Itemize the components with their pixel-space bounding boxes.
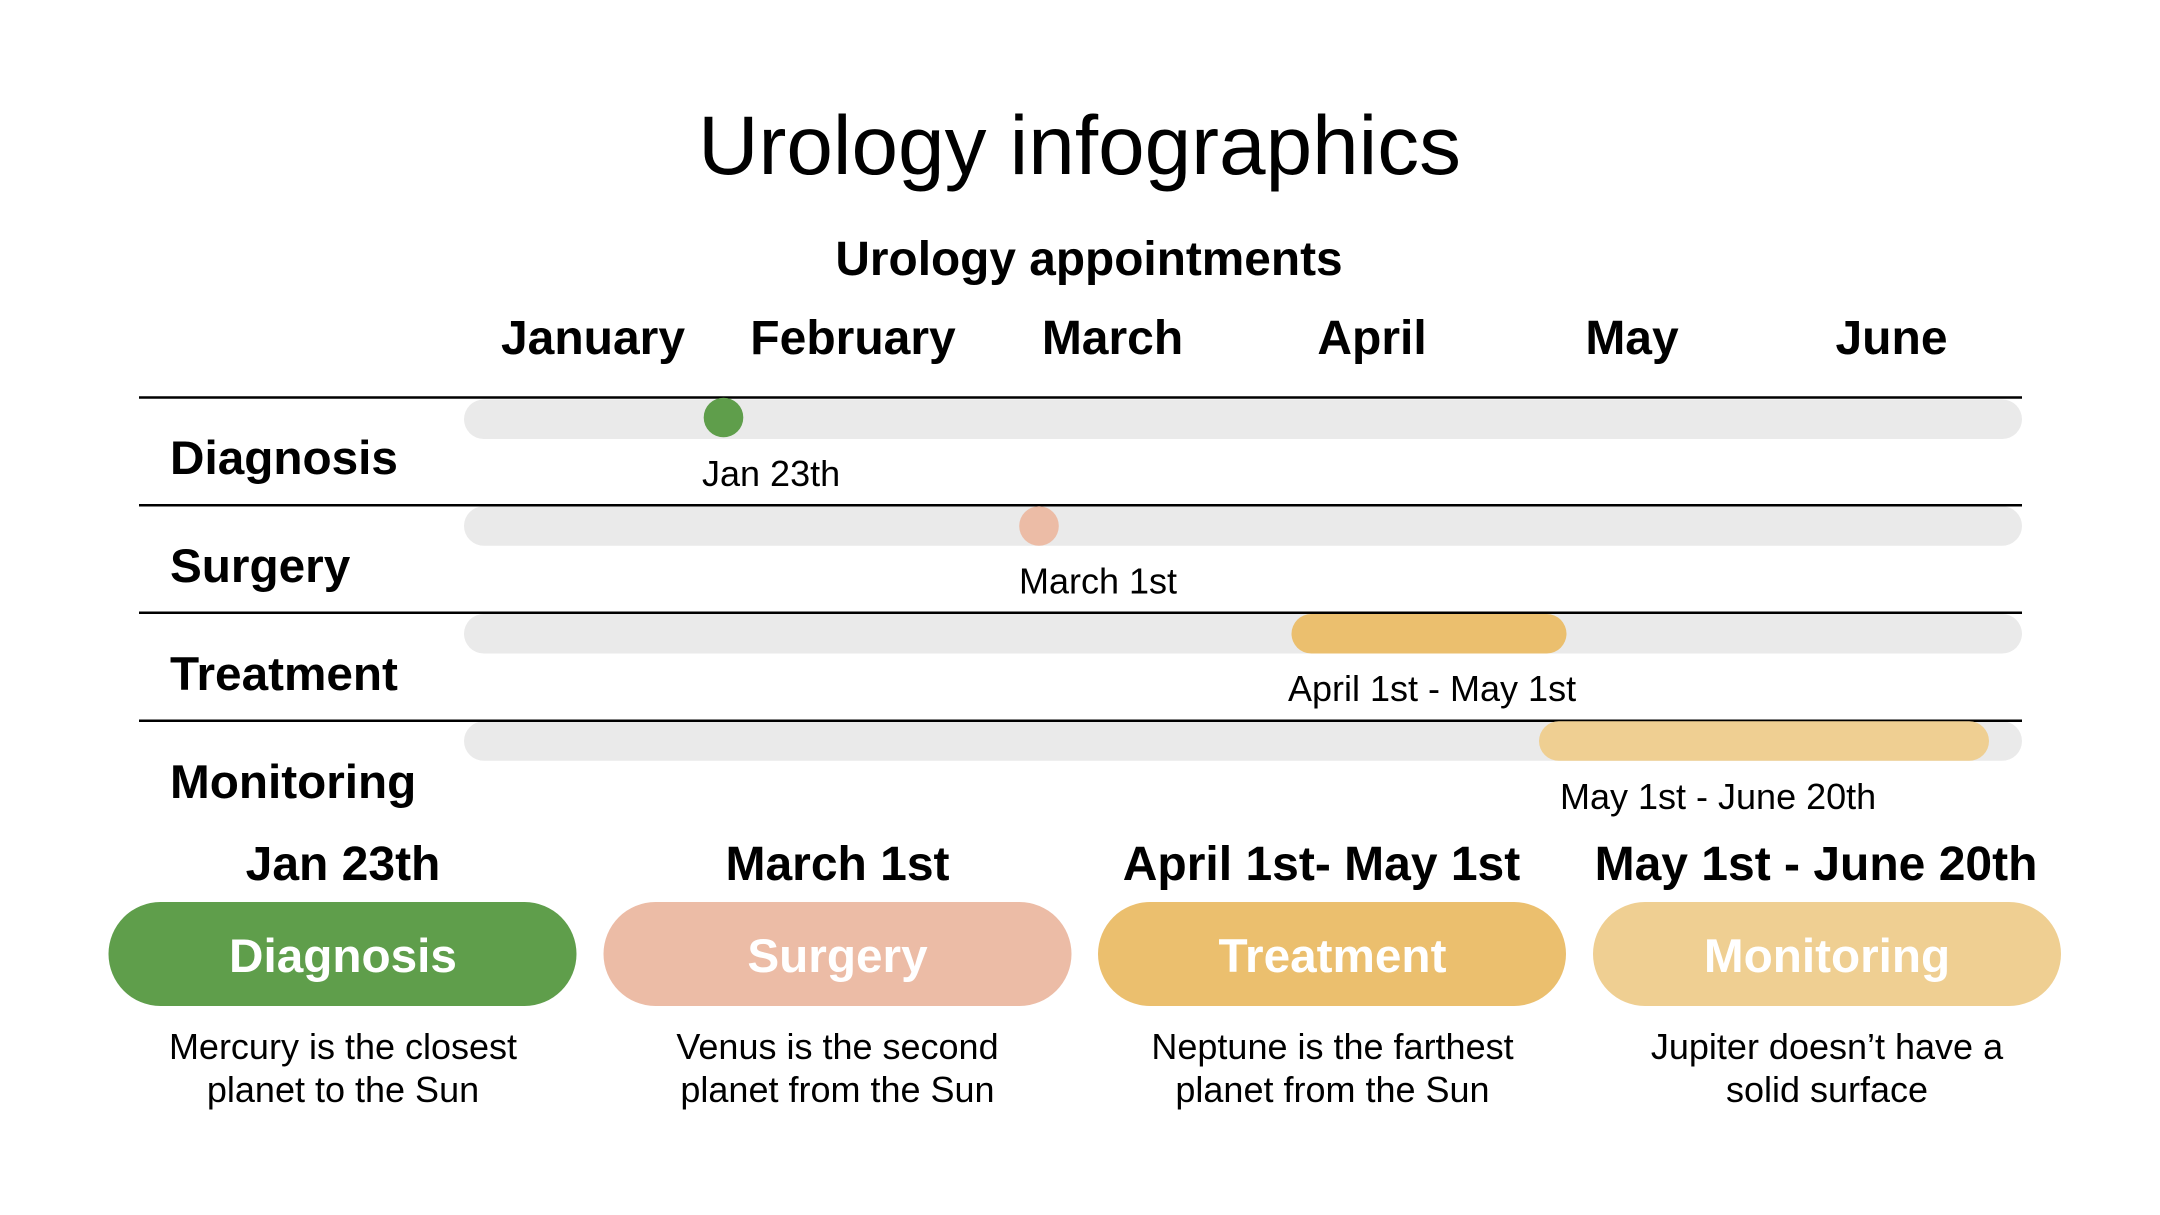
month headers: May bbox=[1585, 312, 1679, 365]
panel: surgery card: March 1st bbox=[725, 838, 950, 891]
row: treatment bbox=[139, 613, 2022, 709]
panel: diagnosis card: Diagnosis bbox=[229, 930, 457, 983]
panel: diagnosis card: planet to the Sun bbox=[207, 1069, 479, 1110]
row: monitoring bbox=[139, 721, 2022, 817]
month headers bbox=[501, 312, 1948, 365]
panel: diagnosis card: Mercury is the closest bbox=[169, 1026, 517, 1067]
title: Urology infographics bbox=[698, 98, 1461, 192]
panel: diagnosis card bbox=[108, 838, 576, 1110]
panel: surgery card bbox=[604, 838, 1072, 1110]
row: treatment: April 1st - May 1st bbox=[1288, 668, 1576, 709]
panel: surgery card: Surgery bbox=[747, 930, 928, 983]
row: diagnosis: Diagnosis bbox=[170, 432, 398, 485]
panel: treatment card: Neptune is the farthest bbox=[1151, 1026, 1514, 1067]
panel: monitoring card: Monitoring bbox=[1704, 930, 1950, 983]
month headers: March bbox=[1042, 312, 1183, 365]
panel: treatment card: planet from the Sun bbox=[1175, 1069, 1490, 1110]
panel: surgery card: planet from the Sun bbox=[680, 1069, 995, 1110]
row: monitoring: Monitoring bbox=[170, 756, 416, 809]
subtitle: Urology appointments bbox=[835, 233, 1343, 286]
row: diagnosis: Jan 23th bbox=[702, 453, 840, 494]
row: surgery bbox=[139, 505, 2022, 602]
panel: treatment card: Treatment bbox=[1219, 930, 1447, 983]
month headers: April bbox=[1317, 312, 1427, 365]
month headers: June bbox=[1835, 312, 1948, 365]
row: treatment: Treatment bbox=[170, 648, 398, 701]
panel: diagnosis card: Jan 23th bbox=[246, 838, 440, 891]
panel: treatment card: April 1st- May 1st bbox=[1123, 838, 1520, 891]
panel: timeline chart bbox=[139, 398, 2022, 817]
panel: surgery card: Venus is the second bbox=[676, 1026, 999, 1067]
panel: monitoring card: Jupiter doesn’t have a bbox=[1651, 1026, 2004, 1067]
month headers: January bbox=[501, 312, 685, 365]
panel: monitoring card bbox=[1593, 838, 2061, 1110]
panel: treatment card bbox=[1098, 838, 1566, 1110]
panel: monitoring card: May 1st - June 20th bbox=[1595, 838, 2037, 891]
row: monitoring: May 1st - June 20th bbox=[1560, 776, 1876, 817]
row: diagnosis bbox=[139, 398, 2022, 494]
row: surgery: Surgery bbox=[170, 540, 351, 593]
panel: monitoring card: solid surface bbox=[1726, 1069, 1928, 1110]
row: surgery: March 1st bbox=[1019, 560, 1177, 602]
month headers: February bbox=[750, 312, 956, 365]
